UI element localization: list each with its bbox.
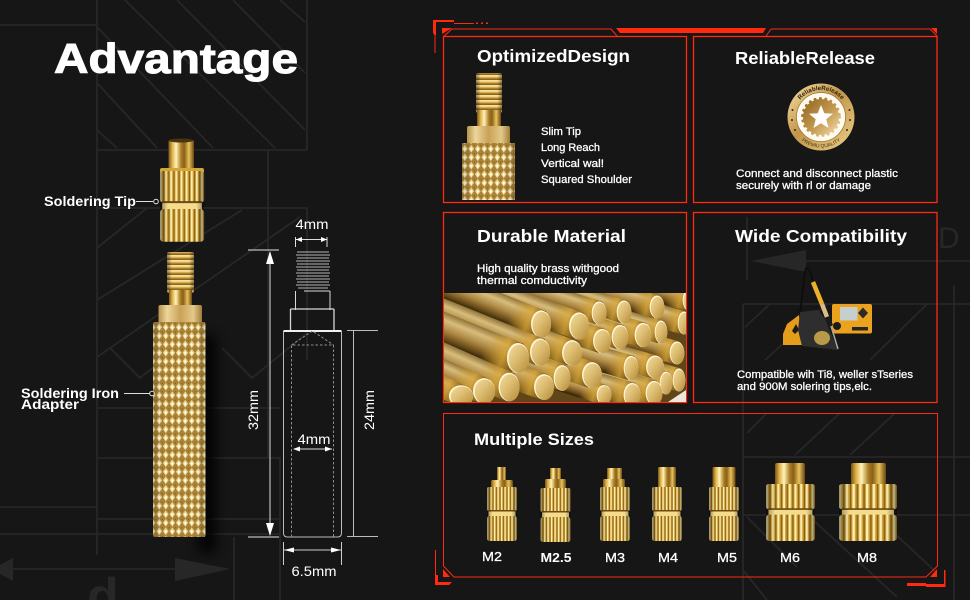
description: and 900M solering tips,elc. (737, 381, 872, 393)
heading: Durable Material (477, 226, 626, 246)
background letters: D (938, 222, 960, 255)
description: securely with rl or damage (736, 180, 871, 192)
description (737, 369, 914, 393)
heading: ReliableRelease (735, 48, 875, 68)
label: soldering iron adapter (21, 386, 154, 412)
title: Advantage (54, 35, 298, 82)
tip M2.5: M2.5 (540, 551, 572, 565)
description (736, 168, 899, 192)
tip M2.5 (540, 468, 572, 565)
tip M4 (652, 467, 682, 565)
station controller (832, 304, 872, 334)
feature list: Slim Tip (541, 126, 581, 138)
label: soldering tip: Soldering Tip (44, 194, 136, 209)
icon: quality seal (788, 84, 854, 150)
dimension: bore 4mm (293, 431, 332, 452)
feature list: Long Reach (541, 142, 600, 154)
thread outline (296, 252, 330, 288)
panel: optimized design (444, 36, 686, 202)
tip M6 (766, 463, 815, 565)
dimension: 6.5mm (284, 542, 342, 579)
soldering iron adapter (153, 252, 216, 553)
red tech frame (433, 20, 946, 587)
tip M3: M3 (605, 551, 625, 565)
label: soldering iron adapter: Adapter (21, 397, 80, 412)
tip M4: M4 (658, 551, 678, 565)
dimension: 32mm (245, 250, 279, 537)
heading: Wide Compatibility (735, 226, 907, 246)
panel: multiple sizes (444, 414, 938, 577)
tip M2: M2 (482, 550, 502, 564)
tip M8: M8 (857, 551, 877, 565)
station stand (783, 315, 802, 345)
dimension: top 4mm (296, 216, 328, 247)
dimension: 24mm (347, 330, 378, 536)
adapter shadow (198, 335, 216, 553)
tip M2 (482, 467, 517, 564)
tip M6: M6 (780, 551, 800, 565)
feature list: Vertical wal! (541, 158, 604, 170)
tip M8 (839, 463, 897, 565)
dimension: 32mm: 32mm (245, 390, 261, 430)
dimension: bore 4mm: 4mm (298, 431, 330, 447)
hidden bore (292, 331, 334, 537)
feature list (541, 126, 632, 186)
tip M5 (709, 467, 739, 565)
description: Compatible wih Ti8, weller sTseries (737, 369, 914, 381)
feature list: Squared Shoulder (541, 174, 632, 186)
technical drawing (284, 252, 342, 537)
icon: quality seal: ReliableRelease (798, 86, 844, 100)
label: soldering iron adapter: Soldering Iron (21, 386, 119, 401)
icon: quality seal: PREMIU QUALITY (802, 138, 840, 148)
heading: Multiple Sizes (474, 430, 594, 449)
tip M5: M5 (717, 551, 737, 565)
image: brass rods (444, 293, 686, 402)
dimension: top 4mm: 4mm (296, 216, 328, 232)
description (477, 263, 619, 287)
tip M3 (600, 468, 630, 565)
soldering tip (160, 138, 204, 242)
image: soldering station (783, 268, 872, 350)
dimension: 24mm: 24mm (361, 390, 377, 430)
dimension: 6.5mm: 6.5mm (292, 563, 336, 579)
background letters (87, 222, 960, 600)
description: thermal comductivity (477, 275, 588, 287)
description: High quality brass withgood (477, 263, 619, 275)
heading: OptimizedDesign (477, 46, 630, 66)
panel: durable material (442, 212, 688, 404)
panel: wide compatibility (694, 212, 937, 402)
panel: reliable release (692, 36, 938, 204)
description: Connect and disconnect plastic (736, 168, 899, 180)
adapter close-up image (462, 73, 515, 200)
